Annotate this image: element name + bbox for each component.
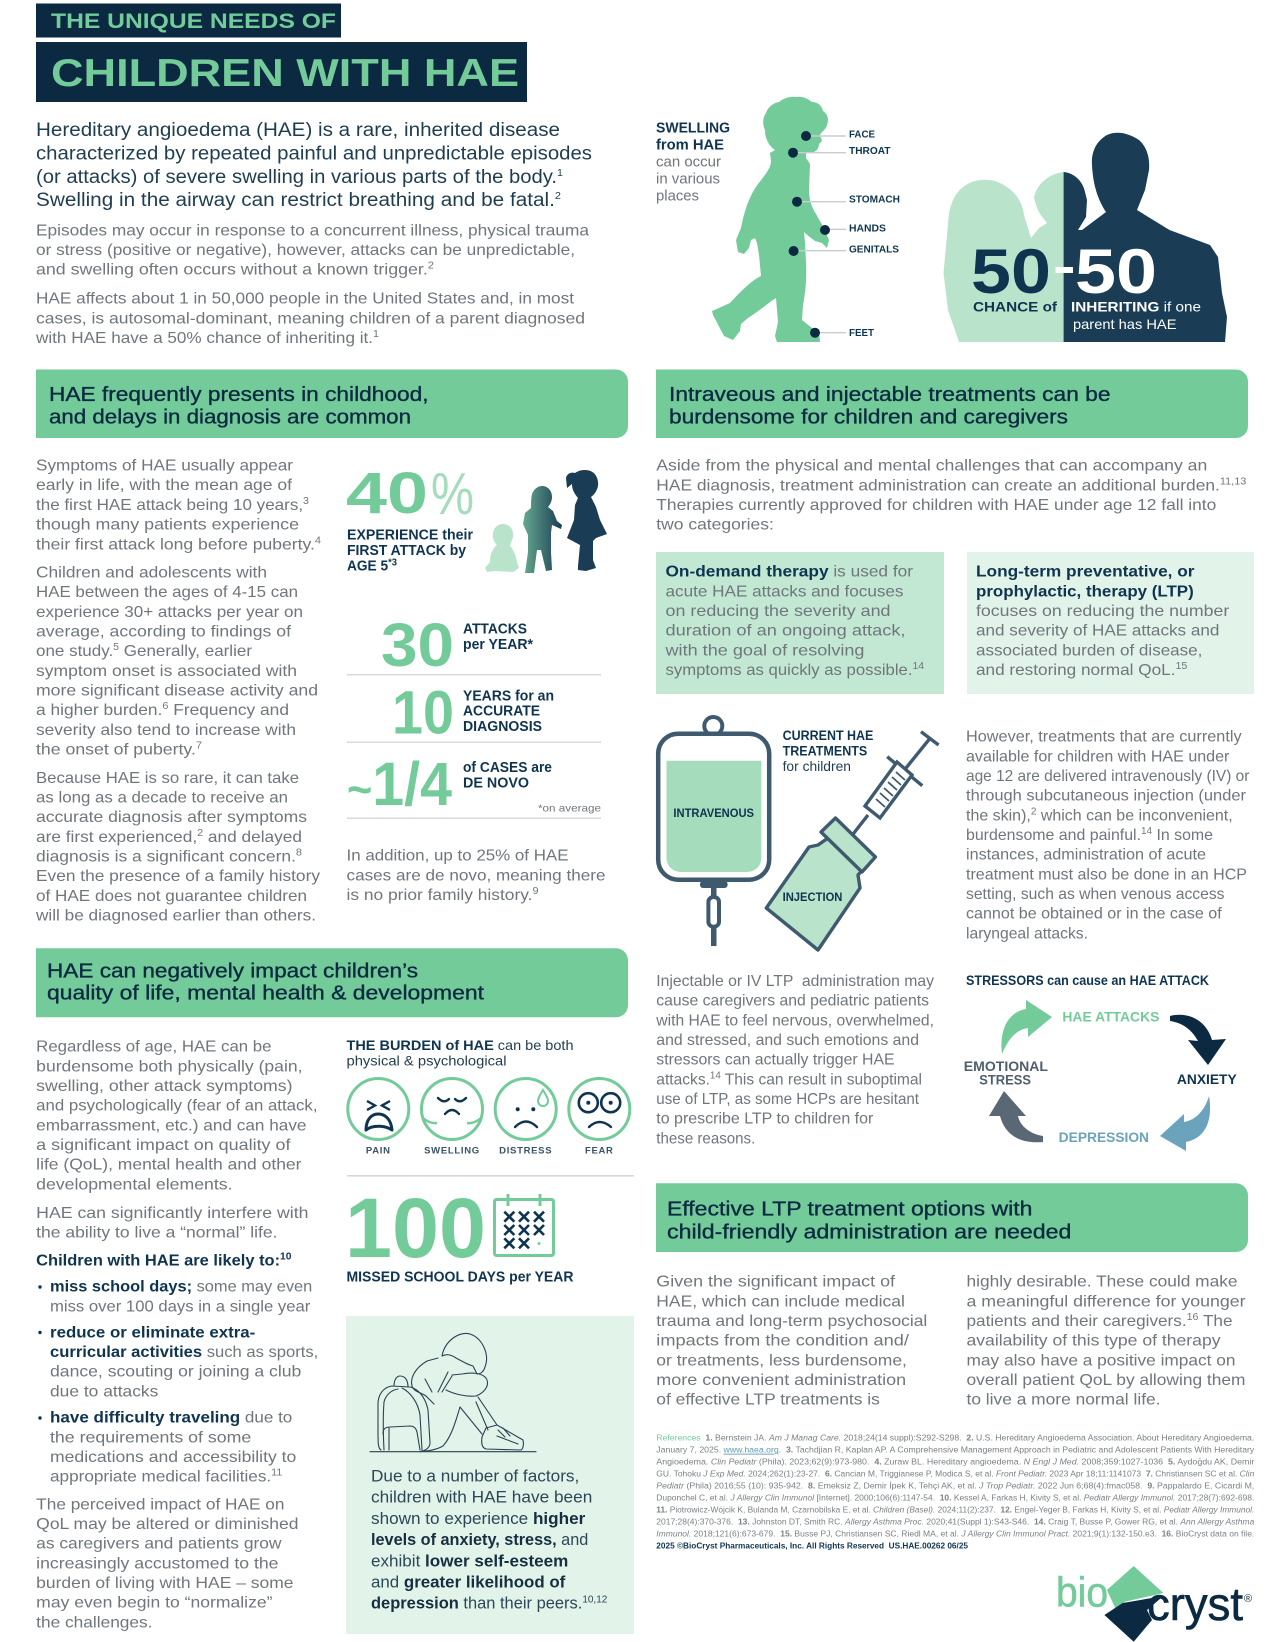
intro text: HAE affects about 1 in 50,000 people in the United States and, in most — [36, 290, 575, 308]
heading: effective LTP: child-friendly administration are needed — [667, 1221, 1071, 1243]
stat: one quarter de novo: of CASES are — [463, 760, 552, 776]
icon: pain face — [348, 1078, 409, 1156]
text: treatment intro: Aside from the physical and mental challenges that can accompany an — [656, 458, 1207, 475]
text: current treatment delivery: which can be inconvenient, — [1036, 807, 1233, 824]
stat: one quarter de novo — [347, 750, 601, 818]
50-50 numbers: 50 — [971, 237, 1051, 307]
text: onset and diagnosis: Generally, earlier — [119, 643, 253, 660]
text: onset and diagnosis: Symptoms of HAE usually appear — [36, 458, 294, 474]
text: onset and diagnosis: will be diagnosed earlier than others. — [35, 908, 316, 924]
swelling caption — [656, 121, 730, 204]
text: LTP stress — [655, 973, 934, 1147]
text: quality of life impact: swelling, other attack symptoms) — [36, 1078, 292, 1095]
heading: childhood presentation — [36, 370, 628, 438]
text: perceived impact — [36, 1496, 298, 1631]
icon: medicine vial — [766, 818, 875, 950]
stat: 40 percent: *3 — [388, 558, 397, 569]
text: de novo cases: is no prior family history. — [346, 887, 518, 904]
panel: on-demand therapy: On-demand therapy is used for — [666, 564, 914, 581]
intro text: cases, is autosomal-dominant, meaning children of a parent diagnosed — [36, 310, 585, 328]
panel: long-term prophylactic therapy: focuses on reducing the number — [976, 603, 1230, 620]
text: current treatment delivery: cannot be obtained or in the case of — [966, 906, 1222, 923]
panel: long-term prophylactic therapy: and severity of HAE attacks and — [976, 623, 1219, 640]
references: Angioedema. Clin Pediatr (Phila). 2023;62(9):973-980. 4. Zuraw BL. Hereditary angioedema. N Engl J Med. 2008;359:1027-1036 5. Aydoğdu AK, Demir — [656, 1457, 1254, 1467]
panel text: children with HAE have been — [371, 1489, 592, 1507]
panel: on-demand therapy: on reducing the severity and — [666, 603, 890, 620]
text: onset and diagnosis: one study. — [36, 643, 109, 660]
swelling caption: in various — [656, 171, 720, 187]
swelling location markers: FEET — [849, 327, 875, 339]
cycle label: anxiety: ANXIETY — [1177, 1072, 1237, 1087]
stressors heading: STRESSORS can cause an HAE ATTACK — [966, 973, 1209, 988]
bullet list: children likely to: reduce or eliminate extra- — [50, 1324, 255, 1341]
icon: IV bag — [658, 717, 769, 946]
text: current treatment delivery: 2 — [1031, 806, 1037, 817]
icon: fear face: FEAR — [585, 1145, 614, 1156]
logo: BioCryst: ® — [1244, 1593, 1252, 1605]
text: onset and diagnosis: the onset of puberty. — [36, 742, 181, 758]
50-50 caption: parent has HAE — [1073, 316, 1176, 332]
text: current treatment delivery: through subcutaneous injection (under — [966, 788, 1247, 805]
text: quality of life impact: a significant impact on quality of — [36, 1137, 291, 1154]
swelling caption: SWELLING — [656, 121, 730, 137]
panel text: 10,12 — [582, 1594, 608, 1605]
text: current treatment delivery: 14 — [1141, 826, 1152, 837]
text: de novo cases: cases are de novo, meaning there — [346, 867, 606, 884]
logo: BioCryst: cryst — [1147, 1578, 1243, 1630]
text: current treatment delivery: available for children with HAE under — [966, 748, 1230, 765]
bullet list: children likely to: Children with HAE are likely to: — [36, 1253, 274, 1270]
text: onset and diagnosis: symptom onset is associated with — [36, 663, 297, 680]
text: onset and diagnosis: Because HAE is so rare, it can take — [36, 770, 299, 787]
swelling location markers: FACE — [849, 129, 875, 141]
panel text: Due to a number of factors, — [371, 1468, 579, 1486]
text: onset and diagnosis: Even the presence of a family history — [36, 868, 320, 885]
text: LTP need right column: highly desirable. These could make — [966, 1274, 1238, 1291]
text: LTP stress: attacks. — [656, 1071, 711, 1088]
text: current treatment delivery: However, treatments that are currently — [966, 729, 1242, 746]
intro text: 2 — [428, 260, 434, 272]
panel: long-term prophylactic therapy: associated burden of disease, — [976, 642, 1202, 659]
text: quality of life impact: HAE can significantly interfere with — [36, 1205, 308, 1222]
50-50 inheritance graphic — [944, 133, 1227, 342]
stat: 30 attacks: 30 — [381, 611, 454, 679]
icon: parent and child silhouette — [944, 133, 1227, 342]
icon: swelling face — [422, 1078, 482, 1156]
intro text: 2 — [555, 191, 561, 202]
panel: long-term prophylactic therapy: prophylactic, therapy (LTP) — [976, 583, 1194, 600]
stat: 30 attacks: ATTACKS — [463, 621, 527, 637]
stressors cycle diagram — [964, 973, 1237, 1151]
text: onset and diagnosis: Frequency and — [168, 702, 289, 719]
bullet list: children likely to — [36, 1252, 318, 1486]
text: quality of life impact — [36, 1039, 317, 1242]
text: current treatment delivery: the skin), — [966, 807, 1031, 824]
panel: long-term prophylactic therapy: 15 — [1175, 661, 1188, 672]
text: onset and diagnosis — [35, 458, 321, 924]
text: current treatment delivery: instances, administration of acute — [966, 847, 1206, 864]
bullet list: children likely to: miss over 100 days in a single year — [50, 1299, 311, 1316]
heading: effective LTP: Effective LTP treatment options with — [667, 1199, 1032, 1221]
references: References 1. Bernstein JA. Am J Manag Care. 2018;24(14 suppl):S292-S298. 2. U.S. Hereditary Angioedema Association. About Hereditary Angioedema. — [656, 1433, 1254, 1443]
text: treatment intro: 11,13 — [1220, 476, 1247, 487]
text: LTP stress: and stressed, and such emotions and — [656, 1032, 919, 1049]
icon: walking child silhouette — [712, 97, 829, 342]
intro text: (or attacks) of severe swelling in various parts of the body. — [36, 167, 525, 188]
burden caption: THE BURDEN of HAE can be both — [346, 1037, 574, 1053]
intro text: and swelling often occurs without a known trigger. — [36, 262, 388, 278]
text: LTP stress: use of LTP, as some HCPs are hesitant — [656, 1091, 920, 1108]
panel text: depression than their peers. — [371, 1594, 583, 1612]
arrow: stress to attacks — [1001, 1000, 1052, 1054]
text: quality of life impact: developmental elements. — [36, 1176, 232, 1193]
stat: one quarter de novo: ~1/4 — [347, 750, 452, 818]
text: LTP need right column: overall patient QoL by allowing them — [966, 1372, 1246, 1389]
intro text: or stress (positive or negative), however, attacks can be unpredictable, — [36, 242, 575, 259]
text: LTP stress: to prescribe LTP to children for — [656, 1111, 874, 1128]
icon: distress face: DISTRESS — [499, 1145, 552, 1156]
panel: on-demand therapy: symptoms as quickly as possible. — [666, 662, 902, 679]
arrow: anxiety to depression — [1160, 1096, 1210, 1151]
heading: treatment burden: Intraveous and injectable treatments can be — [669, 384, 1110, 406]
text: LTP stress: 14 — [710, 1070, 721, 1081]
text: onset and diagnosis: Children and adolescents with — [36, 564, 267, 582]
text: onset and diagnosis: 5 — [113, 642, 120, 653]
text: quality of life impact: and psychologically (fear of an attack, — [36, 1098, 317, 1115]
text: LTP need right column: The — [1199, 1313, 1233, 1330]
panel: on-demand therapy — [656, 552, 944, 694]
title: THE UNIQUE NEEDS OF — [51, 10, 336, 33]
text: onset and diagnosis: and delayed — [203, 829, 302, 846]
text: LTP stress: these reasons. — [656, 1130, 755, 1147]
text: onset and diagnosis: though many patients experience — [36, 516, 299, 534]
bullet list: children likely to: 10 — [280, 1252, 292, 1263]
treatments caption: for children — [783, 759, 851, 774]
text: onset and diagnosis: accurate diagnosis after symptoms — [36, 809, 307, 826]
intro text — [35, 120, 592, 347]
text: perceived impact: may even begin to “normalize” — [36, 1595, 273, 1612]
panel text: and greater likelihood of — [371, 1573, 566, 1591]
intro text: Episodes may occur in response to a concurrent illness, physical trauma — [36, 222, 589, 240]
text: LTP need left column: trauma and long-term psychosocial — [656, 1313, 927, 1330]
stat: 30 attacks — [381, 611, 533, 679]
text: current treatment delivery: In some — [1152, 827, 1213, 844]
stat: 30 attacks: per YEAR* — [463, 637, 533, 653]
references: 11. Piotrowicz-Wójcik K, Bulanda M, Czarnobilska E, et al. Children (Basel). 2024;11(2):237. 12. Engel-Yeger B, Farkas H, Kivity S, et al. Pediatr Allergy Immunol. — [656, 1505, 1254, 1515]
text: quality of life impact: embarrassment, etc.) and can have — [36, 1117, 307, 1134]
text: LTP need left column: Given the significant impact of — [656, 1274, 896, 1291]
text: de novo cases — [346, 848, 606, 904]
stat: 40 percent: FIRST ATTACK by — [347, 543, 466, 559]
text: LTP need right column: availability of this type of therapy — [966, 1333, 1220, 1350]
swelling location markers: STOMACH — [849, 194, 900, 206]
panel: on-demand therapy: with the goal of resolving — [664, 642, 864, 659]
stat: one quarter de novo: DE NOVO — [463, 775, 529, 791]
text: LTP stress: cause caregivers and pediatric patients — [656, 993, 929, 1010]
text: current treatment delivery: treatment must also be done in an HCP — [966, 866, 1247, 883]
text: current treatment delivery: age 12 are delivered intravenously (IV) or — [966, 768, 1250, 785]
stat: 40 percent: % — [431, 461, 474, 527]
title — [36, 4, 527, 102]
text: LTP need right column: 16 — [1187, 1312, 1199, 1323]
references: GU. Tohoku J Exp Med. 2024;262(1):23-27. 6. Cancian M, Triggianese P, Modica S, et al. Front Pediatr. 2023 Apr 18;11:1141073 7. Christiansen SC et al. Clin — [656, 1469, 1255, 1479]
cycle label: HAE attacks: HAE ATTACKS — [1062, 1010, 1159, 1025]
text: current treatment delivery: burdensome and painful. — [966, 827, 1142, 844]
text: onset and diagnosis: as long as a decade to receive an — [36, 790, 288, 806]
burden caption: physical & psychological — [346, 1053, 506, 1069]
bullet list: children likely to: dance, scouting or joining a club — [50, 1364, 301, 1381]
text: onset and diagnosis: diagnosis is a significant concern. — [36, 848, 274, 866]
cycle label: emotional stress: STRESS — [979, 1072, 1031, 1087]
text: LTP need left column: impacts from the condition and/ — [656, 1333, 910, 1350]
50-50 caption: INHERITING if one — [1071, 298, 1201, 314]
text: treatment intro: Therapies currently approved for children with HAE under age 12 fall into — [656, 497, 1216, 514]
text: quality of life impact: the ability to live a “normal” life. — [36, 1225, 278, 1242]
text: LTP need right column: a meaningful difference for younger — [966, 1293, 1246, 1310]
text: current treatment delivery: laryngeal attacks. — [966, 925, 1088, 942]
burden caption — [346, 1037, 574, 1069]
stat: 10 years: YEARS for an — [463, 689, 554, 705]
icon: syringe — [850, 732, 939, 838]
panel text: shown to experience higher — [371, 1510, 586, 1528]
text: current treatment delivery: setting, such as when venous access — [966, 886, 1224, 903]
text: LTP need left column — [656, 1274, 927, 1409]
logo: BioCryst: bio — [1056, 1569, 1108, 1616]
references — [656, 1433, 1255, 1550]
text: treatment intro: two categories: — [656, 517, 774, 534]
stat: 40 percent: AGE 5 — [347, 559, 391, 575]
intro text: characterized by repeated painful and unpredictable episodes — [36, 144, 592, 164]
arrow: attacks to anxiety — [1170, 1015, 1226, 1065]
panel: on-demand therapy: 14 — [912, 661, 925, 672]
bullet list: children likely to: curricular activities such as sports, — [50, 1344, 318, 1361]
treatments illustration — [658, 717, 939, 950]
text: perceived impact: increasingly accustomed to the — [36, 1555, 279, 1572]
swelling location markers — [788, 129, 900, 339]
references: 2017;28(4):370-376. 13. Johnston DT, Smith RC. Allergy Asthma Proc. 2020;41(Suppl 1):S43-S46. 14. Craig T, Busse P, Gower RG, et al. Ann Allergy Asthma — [656, 1517, 1255, 1527]
bullet list: children likely to: due to attacks — [50, 1383, 158, 1400]
text: onset and diagnosis: 8 — [296, 848, 302, 858]
text: LTP need left column: HAE, which can include medical — [656, 1293, 905, 1310]
icon: child sitting with backpack — [370, 1333, 536, 1452]
references: Immunol. 2018;121(6):673-679. 15. Busse PJ, Christiansen SC, Riedl MA, et al. J Allergy Clin Immunol Pract. 2021;9(1):132-150.e3. 16. BioCryst data on file. — [656, 1529, 1254, 1539]
text: onset and diagnosis: 7 — [196, 740, 202, 752]
bullet list: children likely to: have difficulty traveling due to — [50, 1410, 292, 1427]
swelling location markers: HANDS — [849, 222, 886, 234]
text: perceived impact: QoL may be altered or diminished — [36, 1516, 298, 1533]
swelling caption: from HAE — [656, 138, 724, 154]
text: onset and diagnosis: severity also tend to increase with — [36, 722, 296, 739]
panel: long-term prophylactic therapy — [967, 552, 1254, 694]
panel text: exhibit lower self-esteem — [371, 1553, 568, 1571]
text: LTP stress: stressors can actually trigger HAE — [656, 1052, 895, 1069]
panel: long-term prophylactic therapy: and restoring normal QoL. — [976, 662, 1162, 679]
icon: three children silhouettes — [485, 470, 607, 573]
text: LTP need right column — [966, 1274, 1246, 1409]
text: treatment intro: HAE diagnosis, treatment administration can create an additional burden. — [656, 477, 1175, 494]
text: LTP need right column: to live a more normal life. — [966, 1392, 1160, 1409]
text: de novo cases: 9 — [532, 886, 539, 897]
text: LTP need left column: of effective LTP treatments is — [656, 1392, 880, 1409]
text: LTP stress: Injectable or IV LTP administration may — [656, 973, 934, 990]
stat: 100 missed school days: MISSED SCHOOL DAYS per YEAR — [346, 1270, 574, 1286]
text: onset and diagnosis: early in life, with the mean age of — [36, 477, 293, 494]
stat: 40 percent: EXPERIENCE their — [347, 527, 473, 543]
bullet list: children likely to: miss school days; some may even — [50, 1279, 312, 1296]
bullet list: children likely to: medications and accessibility to — [50, 1449, 296, 1466]
text: onset and diagnosis: more significant disease activity and — [36, 682, 318, 700]
heading: effective LTP — [656, 1183, 1248, 1252]
heading: treatment burden — [656, 370, 1248, 438]
intro text: 1 — [557, 168, 563, 179]
heading: childhood presentation: and delays in diagnosis are common — [49, 407, 411, 429]
icon: calendar — [494, 1194, 554, 1256]
text: perceived impact: the challenges. — [36, 1614, 153, 1631]
stats list — [347, 611, 601, 819]
text: onset and diagnosis: experience 30+ attacks per year on — [36, 604, 303, 621]
50-50 caption — [973, 298, 1201, 332]
text: LTP need right column: may also have a positive impact on — [966, 1352, 1236, 1369]
icon: distress face — [495, 1078, 556, 1156]
text: onset and diagnosis: average, according to findings of — [36, 624, 292, 640]
bullet list: children likely to: appropriate medical facilities. — [50, 1469, 256, 1486]
cycle label: depression: DEPRESSION — [1059, 1130, 1149, 1145]
stat: 10 years: DIAGNOSIS — [463, 719, 542, 735]
panel text — [371, 1468, 608, 1612]
swelling caption: places — [656, 188, 699, 204]
50-50 caption: CHANCE of — [973, 298, 1057, 314]
logo: BioCryst — [1056, 1566, 1252, 1642]
text: onset and diagnosis: of HAE does not guarantee children — [36, 888, 307, 905]
panel: on-demand therapy: acute HAE attacks and focuses — [666, 583, 904, 600]
heading: childhood presentation: HAE frequently presents in childhood, — [49, 384, 428, 406]
swelling caption: can occur — [656, 155, 721, 171]
text: LTP stress: with HAE to feel nervous, overwhelmed, — [655, 1012, 934, 1029]
title: CHILDREN WITH HAE — [51, 52, 519, 95]
icon: swelling face: SWELLING — [424, 1145, 480, 1156]
50-50 numbers — [971, 237, 1157, 307]
text: onset and diagnosis: HAE between the ages of 4-15 can — [36, 584, 298, 601]
icon: medicine vial: INJECTION — [783, 892, 842, 904]
references: January 7, 2025. www.haea.org. 3. Tachdjian R, Kaplan AP. A Comprehensive Management Approach in Pediatric and Adolescent Patients With Hereditary — [656, 1445, 1255, 1455]
text: onset and diagnosis: 3 — [303, 496, 309, 507]
text: LTP need right column: patients and their caregivers. — [966, 1313, 1172, 1330]
stat: 100 missed school days: 100 — [345, 1181, 486, 1275]
heading: quality of life: HAE can negatively impact children’s — [47, 960, 418, 982]
stat: 10 years: ACCURATE — [463, 704, 540, 720]
text: perceived impact: The perceived impact of HAE on — [36, 1496, 285, 1513]
intro text: with HAE have a 50% chance of inheriting it. — [36, 330, 351, 347]
cycle label: emotional stress: EMOTIONAL — [964, 1059, 1048, 1074]
text: quality of life impact: Regardless of age, HAE can be — [36, 1039, 272, 1056]
swelling location markers: THROAT — [849, 145, 891, 157]
text: quality of life impact: burdensome both physically (pain, — [36, 1058, 302, 1075]
swelling location markers: GENITALS — [849, 244, 899, 256]
heading: treatment burden: burdensome for children and caregivers — [669, 407, 1068, 429]
treatments caption: CURRENT HAE — [783, 728, 873, 743]
text: onset and diagnosis: 6 — [162, 701, 169, 712]
stat: one quarter de novo: *on average — [538, 803, 601, 815]
treatments caption — [783, 728, 873, 774]
bullet list: children likely to: 11 — [271, 1468, 283, 1479]
references: 2025 ©BioCryst Pharmaceuticals, Inc. All Rights Reserved US.HAE.00262 06/25 — [656, 1540, 968, 1550]
50-50 numbers: 50 — [1075, 237, 1157, 307]
text: LTP need left column: or treatments, less burdensome, — [656, 1352, 907, 1369]
text: onset and diagnosis: the first HAE attack being 10 years, — [36, 497, 287, 514]
intro text: 1 — [373, 329, 379, 340]
text: de novo cases: In addition, up to 25% of HAE — [346, 848, 568, 865]
text: current treatment delivery — [966, 729, 1250, 942]
heading: quality of life: quality of life, mental health & development — [47, 982, 485, 1004]
text: LTP need left column: more convenient administration — [656, 1372, 906, 1389]
references: Pediatr (Phila) 2016;55 (10): 935-942. 8. Emeksiz Z, Demir İpek K, Tehçi AK, et al. J Trop Pediatr. 2022 Jun 6;68(4):fmac058. 9. Pappalardo E, Cicardi M, — [656, 1481, 1254, 1491]
panel: long-term prophylactic therapy: Long-term preventative, or — [976, 564, 1194, 581]
text: onset and diagnosis: their first attack long before puberty. — [36, 536, 290, 554]
icon: IV bag: INTRAVENOUS — [673, 808, 754, 820]
text: onset and diagnosis: 4 — [315, 536, 321, 546]
intro text: Hereditary angioedema (HAE) is a rare, inherited disease — [36, 120, 560, 141]
panel: on-demand therapy: duration of an ongoing attack, — [666, 623, 906, 640]
text: LTP stress: This can result in suboptimal — [721, 1071, 922, 1088]
text: perceived impact: as caregivers and patients grow — [36, 1536, 282, 1553]
stat: 40 percent — [346, 461, 474, 575]
stat: 10 years — [392, 678, 554, 746]
swelling locations figure — [656, 97, 900, 342]
cycle label: emotional stress — [964, 1059, 1048, 1087]
treatments caption: TREATMENTS — [783, 744, 867, 759]
text: onset and diagnosis: a higher burden. — [36, 702, 153, 719]
stat: 40 percent: 40 — [346, 461, 428, 526]
intro text: Swelling in the airway can restrict breathing and be fatal. — [36, 190, 511, 211]
panel: psychological impact — [346, 1316, 634, 1634]
stat: 10 years: 10 — [392, 678, 454, 746]
icon: pain face: PAIN — [366, 1145, 391, 1156]
text: perceived impact: burden of living with HAE – some — [36, 1575, 294, 1592]
stat: 100 missed school days — [345, 1181, 574, 1286]
icon: fear face — [569, 1078, 630, 1156]
heading: quality of life — [36, 948, 628, 1017]
text: onset and diagnosis: are first experienced, — [36, 829, 185, 846]
text: onset and diagnosis: 2 — [197, 828, 204, 839]
bullet list: children likely to: the requirements of some — [50, 1429, 251, 1446]
references: Duponchel C, et al. J Allergy Clin Immunol [Internet]. 2000;106(6):1147-54. 10. Kessel A, Farkas H, Kivity S, et al. Pediatr Allergy Immunol. 2017;28(7):692-698. — [656, 1493, 1254, 1503]
panel text: levels of anxiety, stress, and — [371, 1531, 588, 1549]
arrow: depression to stress — [989, 1091, 1043, 1142]
burden of HAE faces — [346, 1037, 630, 1156]
text: quality of life impact: life (QoL), mental health and other — [36, 1157, 302, 1174]
text: treatment intro — [656, 458, 1247, 534]
